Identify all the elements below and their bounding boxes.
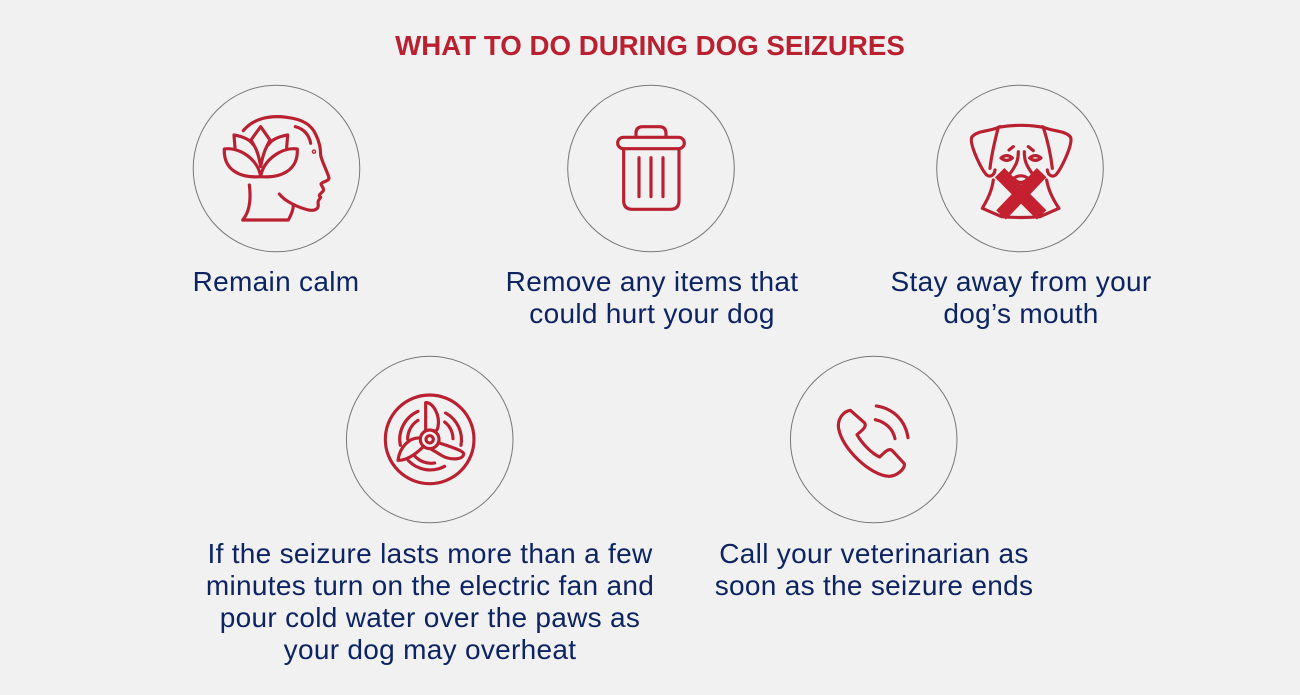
icon: dog head with cross over mouth xyxy=(937,85,1103,252)
text: remove items: could hurt your dog xyxy=(529,298,775,329)
text: stay away from mouth: dog’s mouth xyxy=(943,298,1099,329)
text: call your veterinarian: soon as the seizure ends xyxy=(715,570,1033,601)
icon: calm head with lotus xyxy=(193,85,360,252)
text: stay away from mouth: Stay away from your xyxy=(891,266,1151,296)
text: remove items: Remove any items that xyxy=(506,266,798,296)
text: call your veterinarian xyxy=(715,538,1033,601)
icon: electric fan xyxy=(346,356,513,523)
text: fan and cold water: your dog may overheat xyxy=(284,634,576,665)
text: call your veterinarian: Call your veterinarian as xyxy=(719,538,1029,568)
text: fan and cold water: minutes turn on the electric fan and xyxy=(206,570,654,601)
text: fan and cold water: If the seizure lasts more than a few xyxy=(207,538,652,568)
text: remain calm: Remain calm xyxy=(193,266,359,296)
text: remove items xyxy=(506,266,798,329)
text: fan and cold water: pour cold water over the paws as xyxy=(220,602,640,633)
icon: phone call xyxy=(790,356,957,523)
text: stay away from mouth xyxy=(891,266,1151,329)
text: fan and cold water xyxy=(206,538,654,665)
icon: trash can xyxy=(568,85,734,252)
title: WHAT TO DO DURING DOG SEIZURES xyxy=(395,30,905,60)
